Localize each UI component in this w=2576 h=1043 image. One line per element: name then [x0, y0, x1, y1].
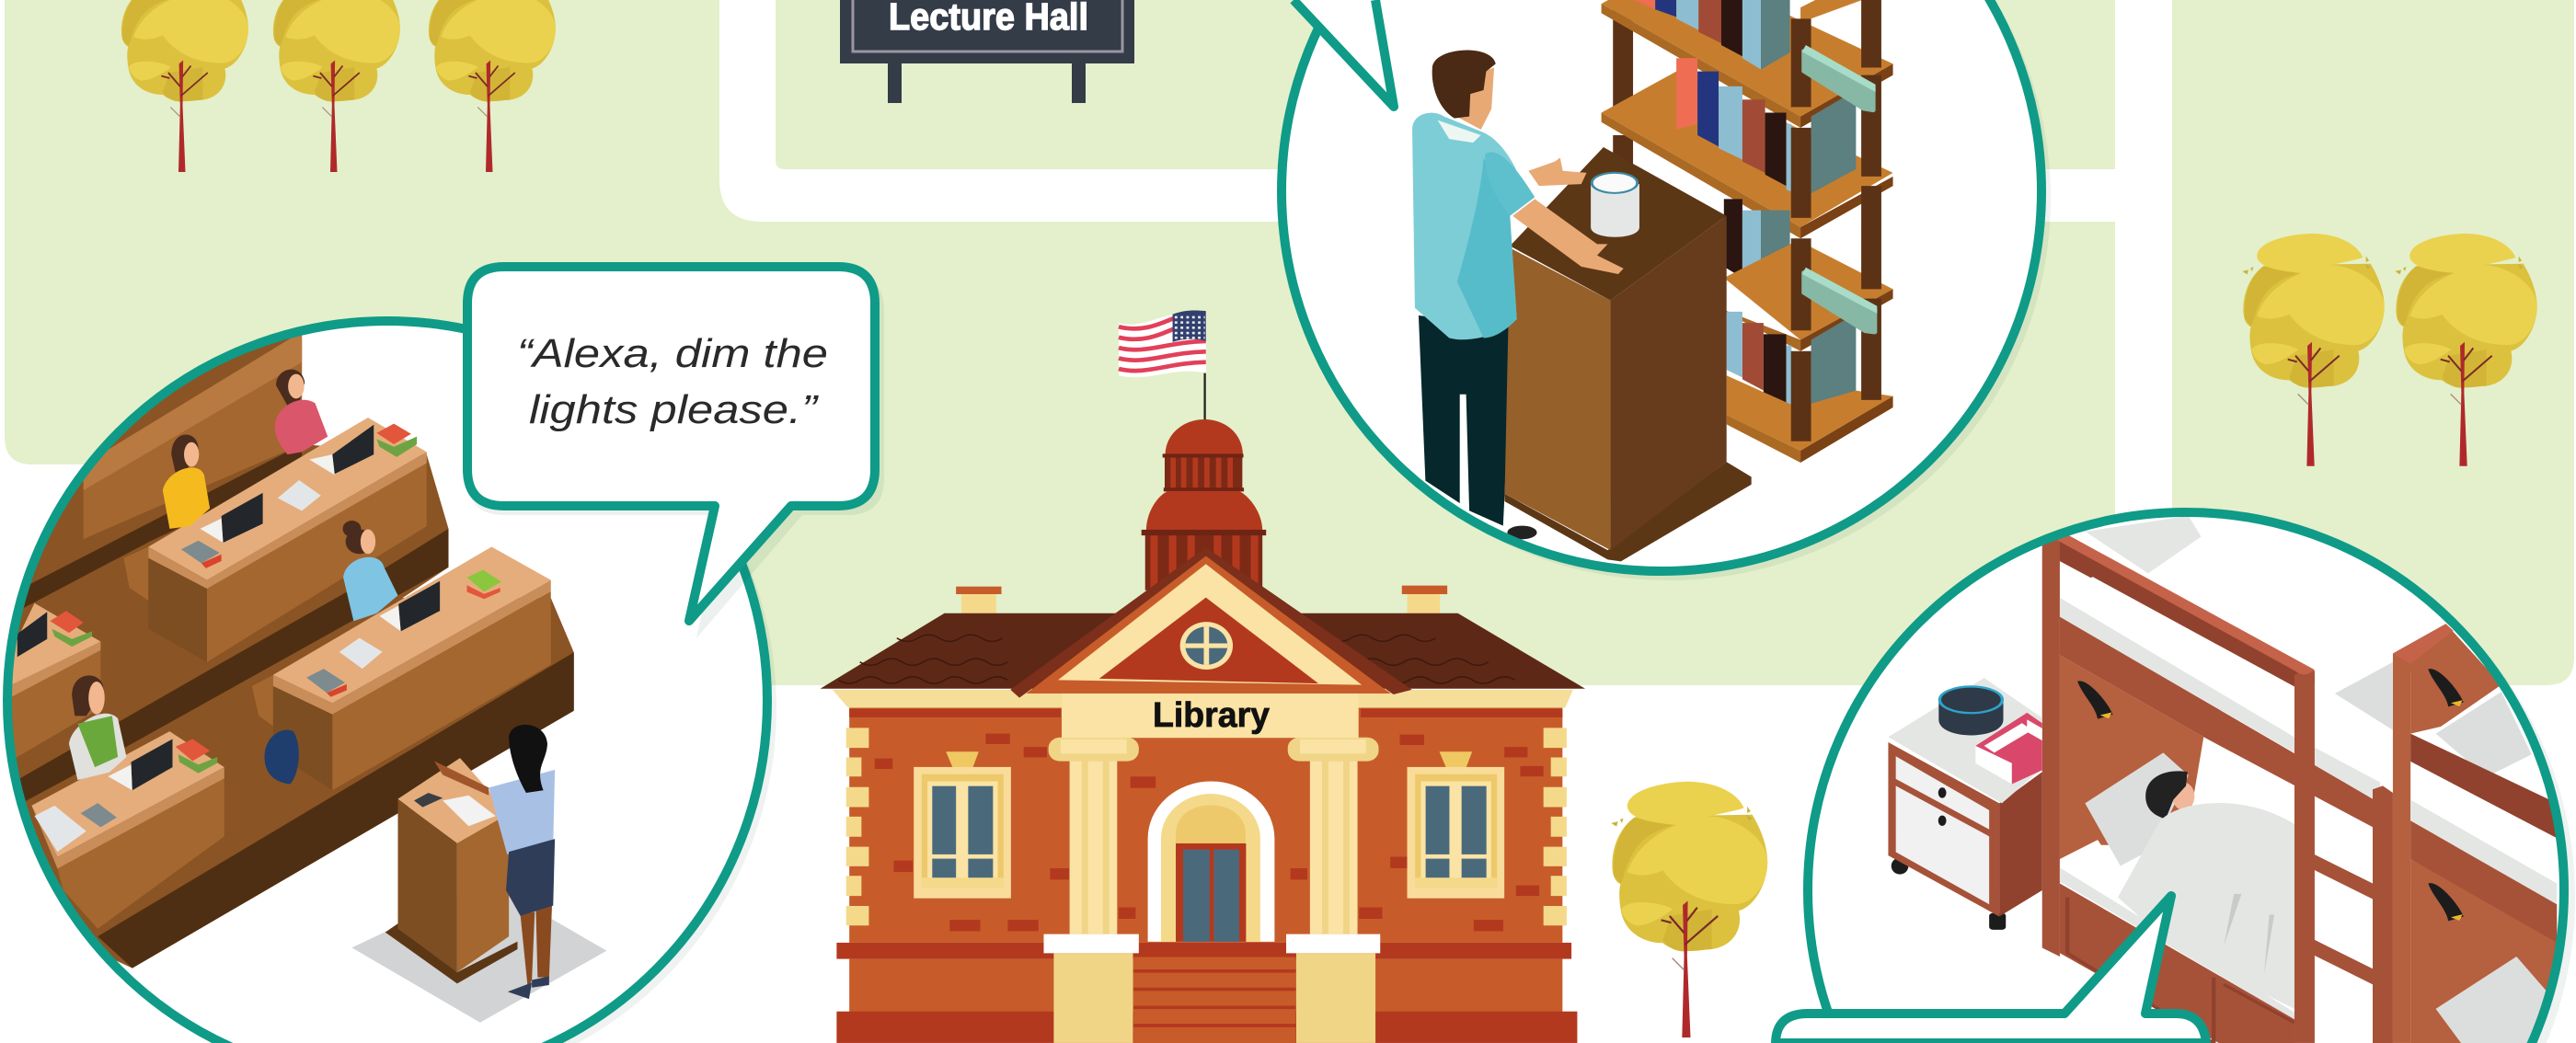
panel: dorm circle — [1808, 512, 2575, 1043]
book — [1975, 713, 2042, 785]
base and steps — [836, 943, 1577, 1043]
desks — [0, 418, 551, 929]
chimneys — [956, 586, 1447, 614]
green lawn: north — [776, 0, 2115, 169]
man with speaker at lectern — [1412, 50, 1752, 561]
smart speaker — [1938, 686, 2004, 735]
arched doorway — [1148, 781, 1274, 942]
green lawn: west and central — [5, 0, 2115, 685]
trees: top left row — [121, 0, 556, 172]
nightstand — [1888, 678, 2042, 930]
library building — [821, 310, 1585, 1043]
callout tail: library speech bubble — [1294, 0, 1394, 107]
callout: dim the lights: “Alexa, dim the — [517, 331, 828, 376]
tree beside library — [1611, 782, 1767, 1037]
pediment — [1010, 547, 1412, 738]
cupola — [1142, 419, 1266, 590]
laptops, books, papers — [17, 424, 501, 852]
students — [69, 370, 397, 780]
dorm scene — [1888, 516, 2557, 1043]
bookshelf — [1602, 0, 1893, 463]
bunk beds — [2042, 516, 2557, 1043]
roof — [821, 613, 1585, 689]
callout: dim the lights: lights please.” — [529, 387, 820, 432]
tiers and floor — [12, 335, 574, 968]
presenter at podium — [351, 725, 606, 1023]
trees: right pair — [2242, 234, 2537, 466]
walls — [833, 690, 1573, 943]
lecture hall scene — [12, 335, 607, 1023]
library building: Library — [1153, 696, 1270, 735]
flag — [1119, 310, 1206, 419]
lecture hall sign — [840, 0, 1134, 103]
entry columns — [1043, 738, 1380, 1043]
callout: dorm speech bubble — [1776, 896, 2206, 1043]
smart speaker — [1591, 173, 1639, 237]
callout: dim the lights — [467, 267, 884, 638]
library shelf scene — [1412, 0, 1893, 561]
windows — [914, 751, 1504, 899]
panel: lecture hall circle — [0, 239, 776, 1043]
green lawn: east — [2172, 0, 2574, 685]
panel: library shelf circle — [1282, 0, 2051, 580]
